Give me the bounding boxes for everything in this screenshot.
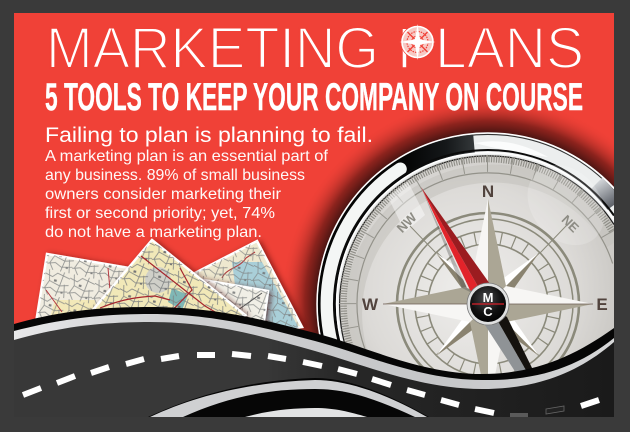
label: NE: NE <box>559 212 582 236</box>
map: small front <box>203 280 268 335</box>
label: NW: NW <box>394 209 420 236</box>
label: W: W <box>362 295 379 314</box>
intro body text: first or second priority; yet, 74% <box>45 205 275 222</box>
intro body text: A marketing plan is an essential part of <box>45 148 329 165</box>
main compass star <box>383 200 593 374</box>
lane dashes <box>23 354 599 413</box>
compass hub with MC logo: M <box>483 290 493 305</box>
map: right <box>195 241 302 335</box>
title: Marketing Plans <box>46 16 584 81</box>
diagonal guide lines <box>410 226 566 253</box>
road silver stripe <box>14 314 614 389</box>
map: centre <box>92 236 252 318</box>
road asphalt <box>14 322 614 417</box>
title: Marketing Plans: MARKETING <box>46 16 379 81</box>
label: N: N <box>482 182 494 201</box>
secondary compass points <box>436 253 539 356</box>
compass glow shadow <box>280 96 614 417</box>
intro body text: any business. 89% of small business <box>45 167 305 184</box>
lower road curve <box>148 378 429 417</box>
compass dial face <box>339 155 614 374</box>
label: E: E <box>596 295 608 314</box>
road <box>14 307 614 417</box>
compass hub with MC logo: C <box>483 304 493 319</box>
title: Marketing Plans: LANS <box>435 16 584 81</box>
road black edge <box>14 307 614 380</box>
compass needle <box>421 187 534 376</box>
compass hub with MC logo <box>467 283 509 325</box>
intro heading: Failing to plan is planning to fail. <box>45 124 373 147</box>
icon: compass rosette in the letter P <box>400 22 436 60</box>
folded road maps <box>34 240 302 345</box>
glass highlights <box>388 165 604 242</box>
intro body text: owners consider marketing their <box>45 186 282 203</box>
compass chrome bezel <box>316 132 614 342</box>
rose rings <box>397 213 579 395</box>
dial tick ring <box>338 154 614 350</box>
title: Marketing Plans: P <box>397 16 436 81</box>
intro body text: do not have a marketing plan. <box>45 224 262 241</box>
map: left <box>35 250 130 318</box>
compass <box>316 132 614 374</box>
faded lane dashes <box>510 406 564 417</box>
intro body text <box>45 148 329 241</box>
